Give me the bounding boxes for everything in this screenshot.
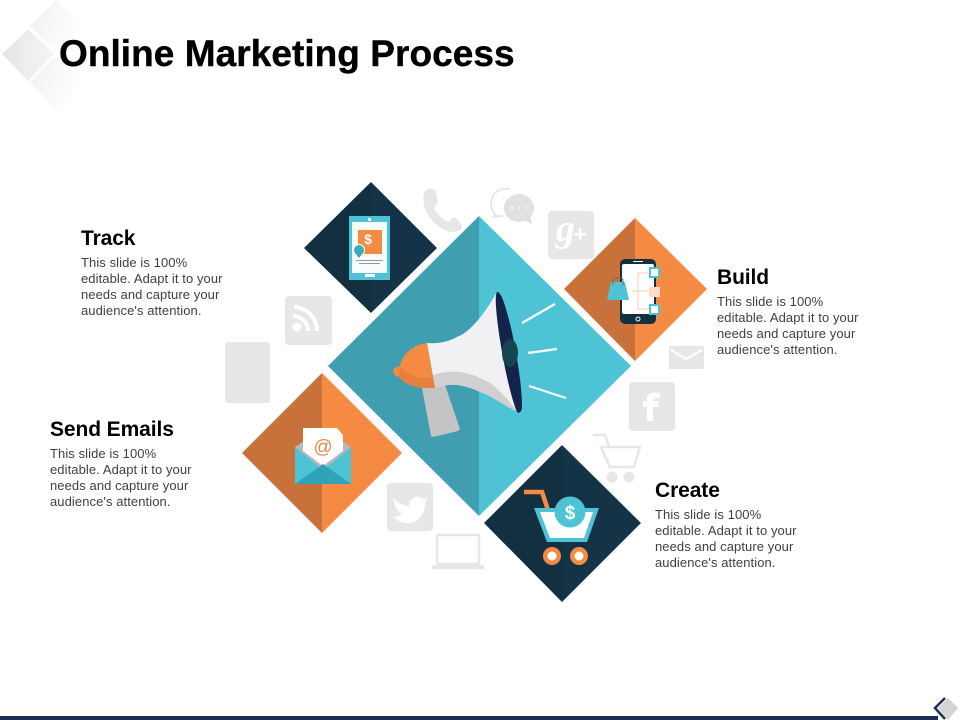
body: send emails: editable. Adapt it to your (50, 462, 192, 477)
body: send emails: This slide is 100% (50, 446, 156, 461)
track diamond (304, 182, 437, 313)
icon: shopping cart outline (593, 435, 640, 482)
text block: create (655, 479, 797, 570)
body: build: This slide is 100% (717, 294, 823, 309)
icon: mail (669, 346, 704, 369)
text block: build (717, 266, 859, 357)
body: create: editable. Adapt it to your (655, 523, 797, 538)
body: build (717, 294, 859, 357)
body: track: This slide is 100% (81, 255, 187, 270)
icon: tablet: $ (364, 231, 372, 247)
body: create: audience's attention. (655, 555, 776, 570)
decorative corner diamonds (2, 0, 84, 110)
send emails diamond (242, 373, 402, 533)
megaphone handle (422, 385, 460, 437)
icon: megaphone (393, 292, 522, 437)
blank grey tile (225, 342, 270, 403)
icon: facebook tile (629, 382, 675, 431)
body: build: needs and capture your (717, 326, 855, 341)
icon: laptop (432, 535, 484, 570)
icon: twitter tile (387, 483, 433, 531)
megaphone mouth (496, 292, 522, 413)
central teal diamond (328, 216, 631, 516)
icon: cart with coin: $ (565, 503, 576, 524)
body: build: editable. Adapt it to your (717, 310, 859, 325)
icon: phone (423, 189, 462, 232)
sound lines (522, 304, 566, 398)
heading: build: Build (717, 266, 769, 289)
icon: google plus tile: g (555, 208, 575, 250)
megaphone horn shadow (433, 372, 518, 412)
icon: rss tile (285, 296, 332, 345)
megaphone orange cap (393, 343, 435, 388)
create diamond (484, 445, 641, 602)
icon: envelope with @: @ (313, 437, 333, 458)
footer bar (0, 716, 938, 720)
heading: send emails: Send Emails (50, 418, 174, 441)
footer chevron diamond (935, 698, 958, 720)
body: build: audience's attention. (717, 342, 838, 357)
body: create: This slide is 100% (655, 507, 761, 522)
text block: track (81, 227, 223, 318)
text block: send emails (50, 418, 192, 509)
body: send emails: audience's attention. (50, 494, 171, 509)
icon: google plus tile (548, 208, 594, 259)
body: track: editable. Adapt it to your (81, 271, 223, 286)
megaphone cap shade (399, 366, 435, 388)
build diamond (564, 218, 707, 361)
body: send emails: needs and capture your (50, 478, 188, 493)
icon: cart with coin (524, 492, 599, 565)
body: track (81, 255, 223, 318)
body: create: needs and capture your (655, 539, 793, 554)
body: track: needs and capture your (81, 287, 219, 302)
icon: envelope with @ (295, 428, 351, 484)
heading: track: Track (81, 227, 135, 250)
icon: smartphone with bag (607, 259, 660, 324)
body: track: audience's attention. (81, 303, 202, 318)
title: Online Marketing Process (59, 33, 515, 74)
icon: chat bubbles (491, 189, 534, 224)
heading: create: Create (655, 479, 720, 502)
megaphone horn (427, 292, 518, 412)
body: send emails (50, 446, 192, 509)
body: create (655, 507, 797, 570)
